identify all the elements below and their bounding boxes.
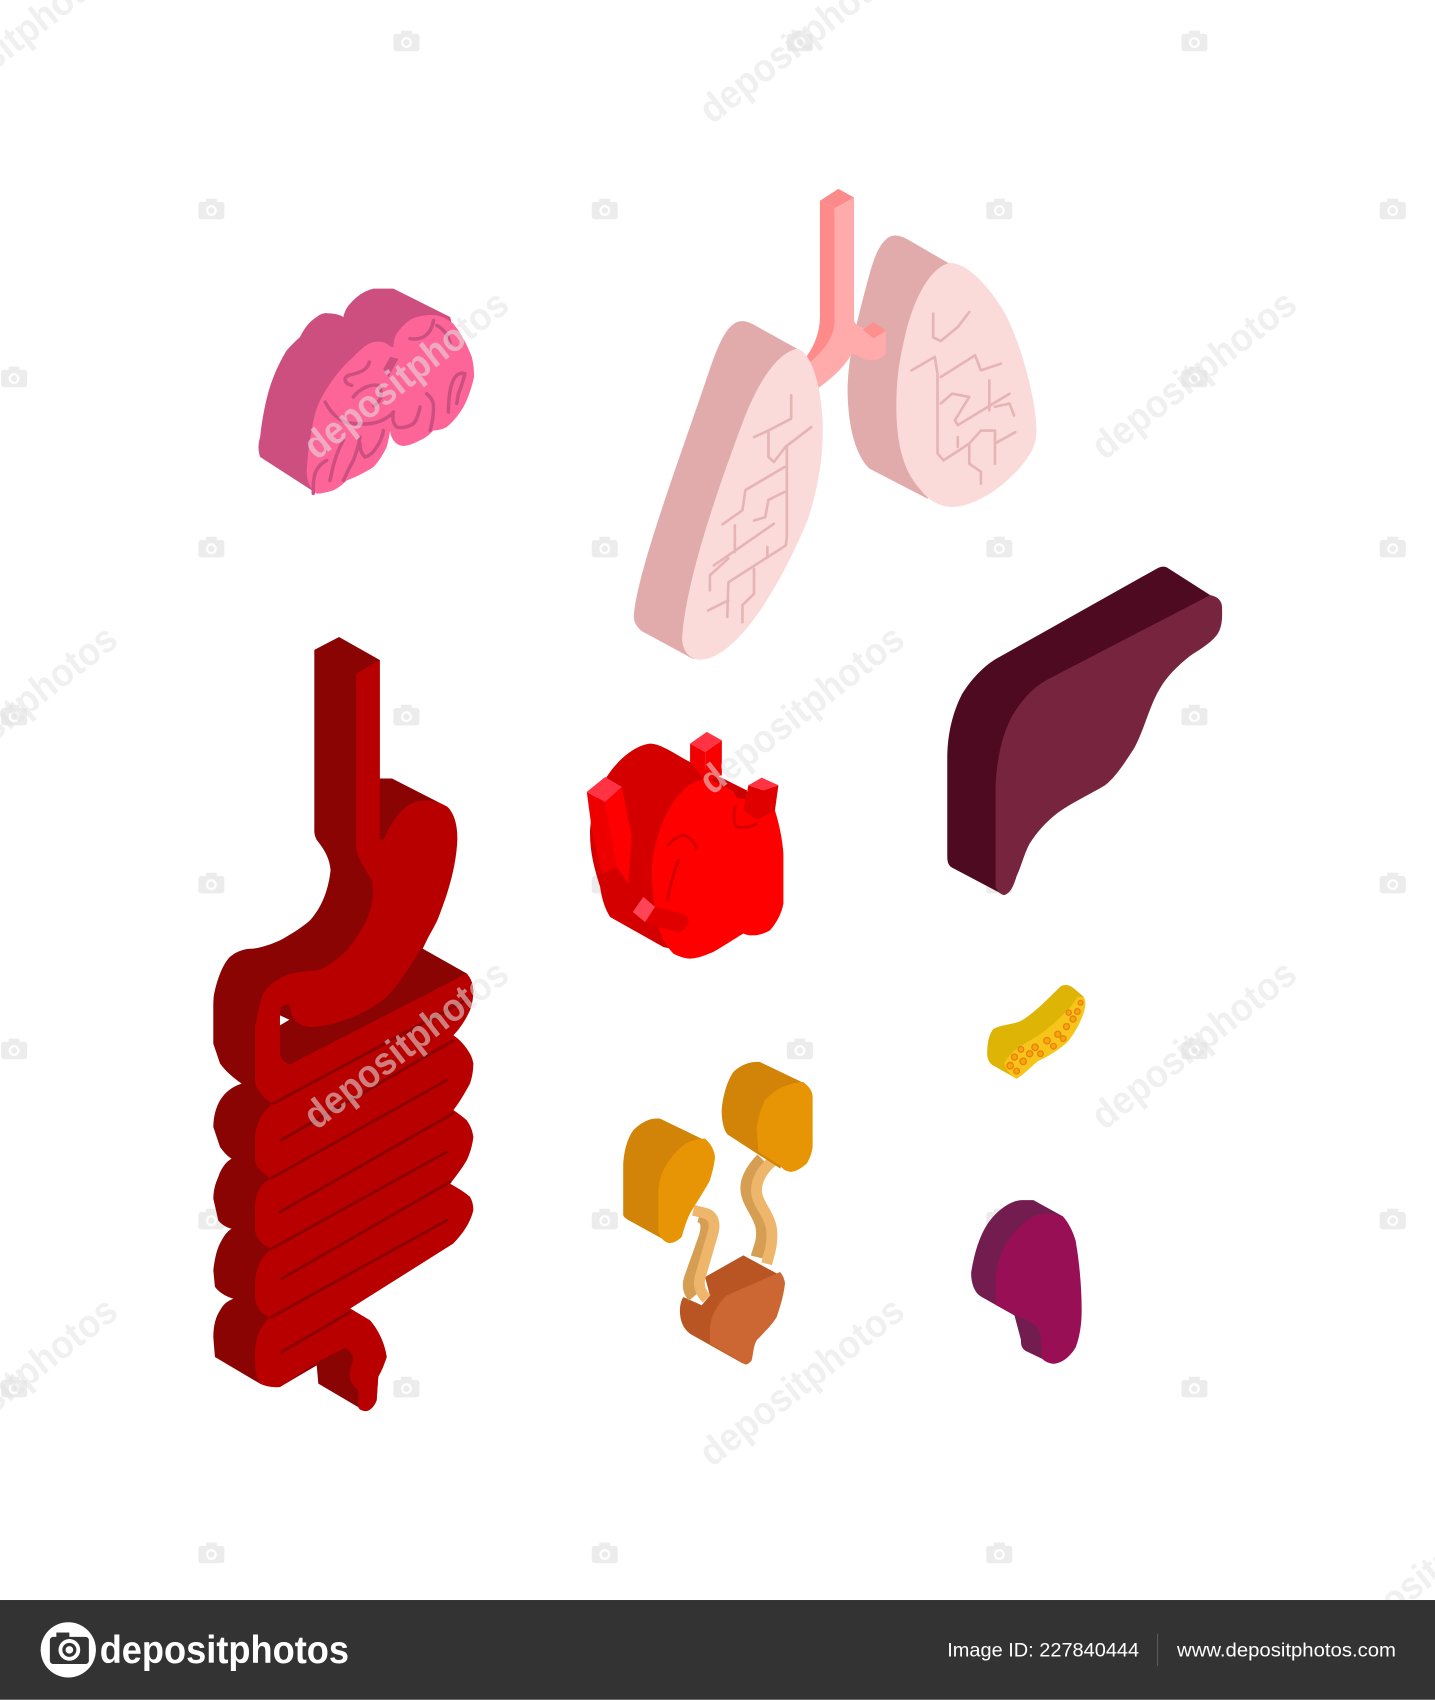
bladder: [680, 1255, 785, 1364]
lower vessel: [633, 897, 689, 932]
icon: kidneys and bladder: [623, 1062, 813, 1364]
right ureter: [746, 1159, 773, 1264]
right lung airways: [912, 312, 1015, 484]
watermark text: depositphotos: [296, 952, 517, 1138]
watermark text: depositphotos: [691, 617, 912, 803]
stomach front face: [255, 660, 457, 1097]
brain fold wedge: [383, 357, 398, 377]
icon: digestive tract: [213, 637, 473, 1411]
watermark text: depositphotos: [1083, 952, 1305, 1138]
white gap at pylorus: [280, 1015, 289, 1025]
image id: Image ID: 227840444: [947, 1639, 1139, 1661]
icon: liver: [947, 567, 1222, 895]
watermark text: depositphotos: [1083, 282, 1305, 468]
footer logo wordmark: depositphotos: [100, 1629, 349, 1672]
right lung: [848, 235, 1036, 507]
left lung: [634, 321, 823, 660]
right vessel: [732, 778, 778, 820]
icon: lungs: [634, 189, 1036, 660]
brain folds: [313, 320, 465, 493]
icon: spleen: [971, 1200, 1082, 1364]
pancreas lobules: [1007, 1000, 1083, 1074]
watermark text: depositphotos: [691, 1289, 912, 1475]
icon: pancreas: [987, 985, 1085, 1079]
small intestine front face: [255, 974, 473, 1411]
footer bar: [0, 1600, 1435, 1700]
watermark text: depositphotos: [296, 282, 517, 468]
footer logo icon: [41, 1622, 96, 1678]
icon: heart: [587, 732, 783, 959]
trachea and bronchi: [806, 189, 886, 390]
oesophagus, stomach and intestine side faces: [213, 637, 473, 1411]
left vessel: [587, 777, 632, 884]
left kidney: [623, 1119, 715, 1243]
website url: www.depositphotos.com: [1176, 1639, 1396, 1661]
top vessel: [690, 732, 722, 781]
intestine fold lines: [271, 1000, 467, 1352]
right kidney: [722, 1062, 813, 1172]
left lung airways: [708, 395, 811, 622]
icon: brain: [258, 289, 474, 494]
heart surface lines: [667, 807, 757, 900]
left ureter: [689, 1210, 714, 1299]
